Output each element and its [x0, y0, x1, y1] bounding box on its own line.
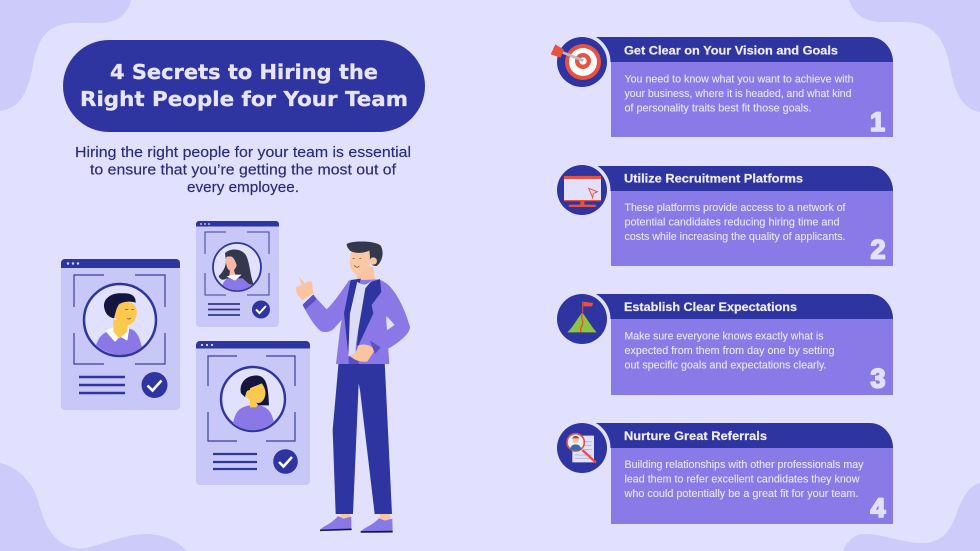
number 4: 4	[870, 493, 886, 523]
body text: who could potentially be a great fit for your team.	[623, 488, 858, 500]
icon: mountain with flag	[567, 302, 597, 332]
body text: These platforms provide access to a network of	[624, 202, 846, 214]
intro text: Hiring the right people for your team is essential	[75, 145, 411, 161]
body text	[624, 74, 854, 114]
panel: step 4	[554, 420, 893, 524]
number 1: 1	[870, 107, 885, 137]
number 2: 2	[870, 234, 886, 264]
number 3: 3	[870, 364, 886, 394]
avatar: long hair	[219, 249, 254, 292]
profile card: man	[61, 259, 180, 410]
title	[63, 40, 425, 132]
body text: Building relationships with other professionals may	[624, 459, 864, 471]
icon: monitor with cursor	[564, 176, 601, 207]
avatar: man	[96, 293, 142, 354]
title: 4 Secrets to Hiring the	[110, 60, 378, 84]
intro text	[75, 145, 411, 196]
body text: lead them to refer excellent candidates they know	[624, 474, 860, 486]
panel: step 3	[554, 290, 893, 395]
panel: step 2	[554, 162, 893, 266]
panel: step 1	[551, 34, 893, 137]
profile card: woman with short hair	[196, 341, 310, 485]
person pointing at the profiles	[296, 241, 410, 532]
body text: potential candidates reducing hiring time and	[624, 216, 840, 228]
icon: resume with magnifier	[567, 434, 596, 463]
body text: your business, where it is headed, and what kind	[624, 88, 852, 100]
profile card: woman with long hair	[196, 221, 279, 327]
heading: Utilize Recruitment Platforms	[624, 172, 803, 186]
avatar: short hair	[232, 375, 276, 432]
intro text: every employee.	[187, 180, 299, 196]
heading: Nurture Great Referrals	[624, 429, 767, 443]
heading: Get Clear on Your Vision and Goals	[624, 44, 838, 58]
body text: You need to know what you want to achieve with	[624, 74, 854, 86]
body text: Make sure everyone knows exactly what is	[624, 330, 824, 342]
body text	[623, 459, 864, 500]
body text	[624, 330, 834, 372]
body text: costs while increasing the quality of applicants.	[624, 231, 846, 243]
icon: target with arrow	[551, 44, 601, 80]
body text: out specific goals and expectations clearly.	[624, 360, 826, 372]
body text: expected from them from day one by setting	[624, 345, 834, 357]
body text: of personality traits best fit those goals.	[624, 102, 812, 114]
title: Right People for Your Team	[80, 87, 408, 111]
intro text: to ensure that you’re getting the most out of	[90, 162, 397, 178]
heading: Establish Clear Expectations	[624, 300, 797, 314]
body text	[624, 202, 846, 243]
